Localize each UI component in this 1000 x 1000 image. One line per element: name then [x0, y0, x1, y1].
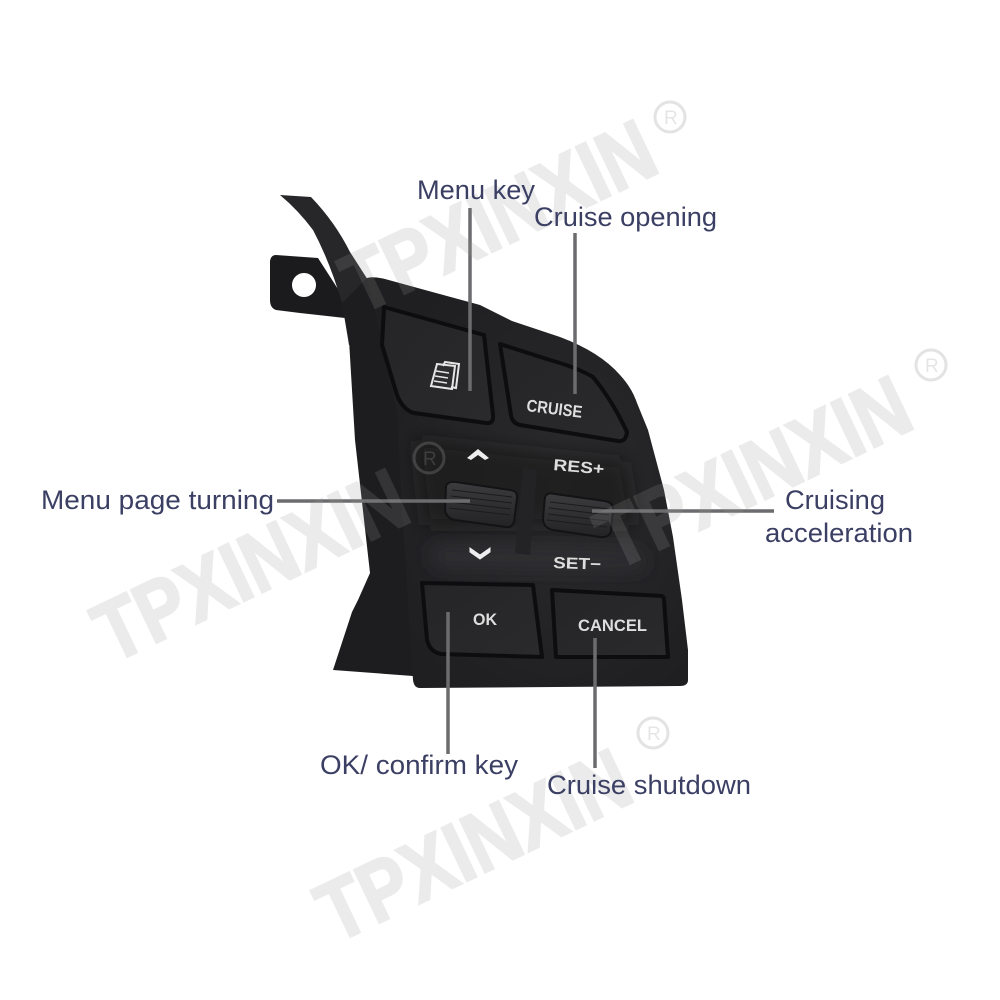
- line: menu key: [468, 208, 472, 391]
- down arrow: [470, 548, 490, 559]
- icon: pages: [431, 362, 459, 389]
- line: cruise shutdown: [593, 638, 597, 768]
- leader lines: [277, 208, 774, 768]
- soft dark zone behind rockers: [415, 440, 635, 525]
- RES+ label: RES+: [553, 457, 605, 478]
- registered mark 1: [414, 443, 444, 473]
- main body: [367, 277, 688, 688]
- dark outer strip and lower left fin: [333, 278, 425, 680]
- OK key: [422, 583, 542, 657]
- line: OK: [446, 612, 450, 754]
- label: cruising acceleration: [765, 485, 913, 548]
- line: menu page turning: [277, 499, 470, 503]
- steering wheel switch unit: [270, 195, 688, 688]
- upper curved wing: [280, 195, 385, 345]
- label: cruising acceleration: acceleration: [765, 518, 913, 548]
- cruise key: CRUISE: [526, 396, 583, 422]
- line: cruising acceleration: [592, 509, 774, 513]
- SET- label: SET−: [553, 555, 601, 574]
- soft light zone below rockers: [430, 545, 645, 570]
- registered mark 3: R: [647, 724, 661, 745]
- label: menu key: Menu key: [417, 175, 535, 205]
- label: cruising acceleration: Cruising: [785, 485, 885, 515]
- registered mark 4: R: [664, 108, 678, 129]
- watermark right: TPXINXIN: [582, 358, 926, 588]
- left rocker: [445, 482, 517, 527]
- watermark upper: TPXINXIN: [327, 102, 671, 332]
- CANCEL key: CANCEL: [578, 616, 647, 635]
- registered mark 2: R: [925, 356, 939, 377]
- watermarks: [79, 102, 946, 961]
- line: cruise opening: [573, 233, 577, 394]
- watermark left: TPXINXIN: [79, 451, 423, 681]
- label: cruise opening: Cruise opening: [534, 202, 717, 232]
- label: menu page turning: Menu page turning: [41, 485, 274, 515]
- middle scroll area: [415, 440, 645, 574]
- menu key: [382, 307, 493, 423]
- label: cruise shutdown: Cruise shutdown: [547, 770, 751, 800]
- right rocker: [543, 493, 613, 537]
- registered mark 2: [916, 350, 946, 380]
- labels: [41, 175, 913, 800]
- label: OK confirm key: OK/ confirm key: [320, 750, 519, 780]
- up arrow: [467, 449, 489, 460]
- cruise key: [500, 344, 627, 441]
- watermark bottom: TPXINXIN: [302, 731, 646, 961]
- registered mark 4: [655, 102, 685, 132]
- OK key: OK: [473, 610, 498, 629]
- registered mark 1: R: [423, 449, 437, 470]
- CANCEL key: [552, 590, 668, 657]
- mounting tab with screw hole: [270, 255, 345, 318]
- registered mark 3: [638, 718, 668, 748]
- center divider: [515, 468, 537, 555]
